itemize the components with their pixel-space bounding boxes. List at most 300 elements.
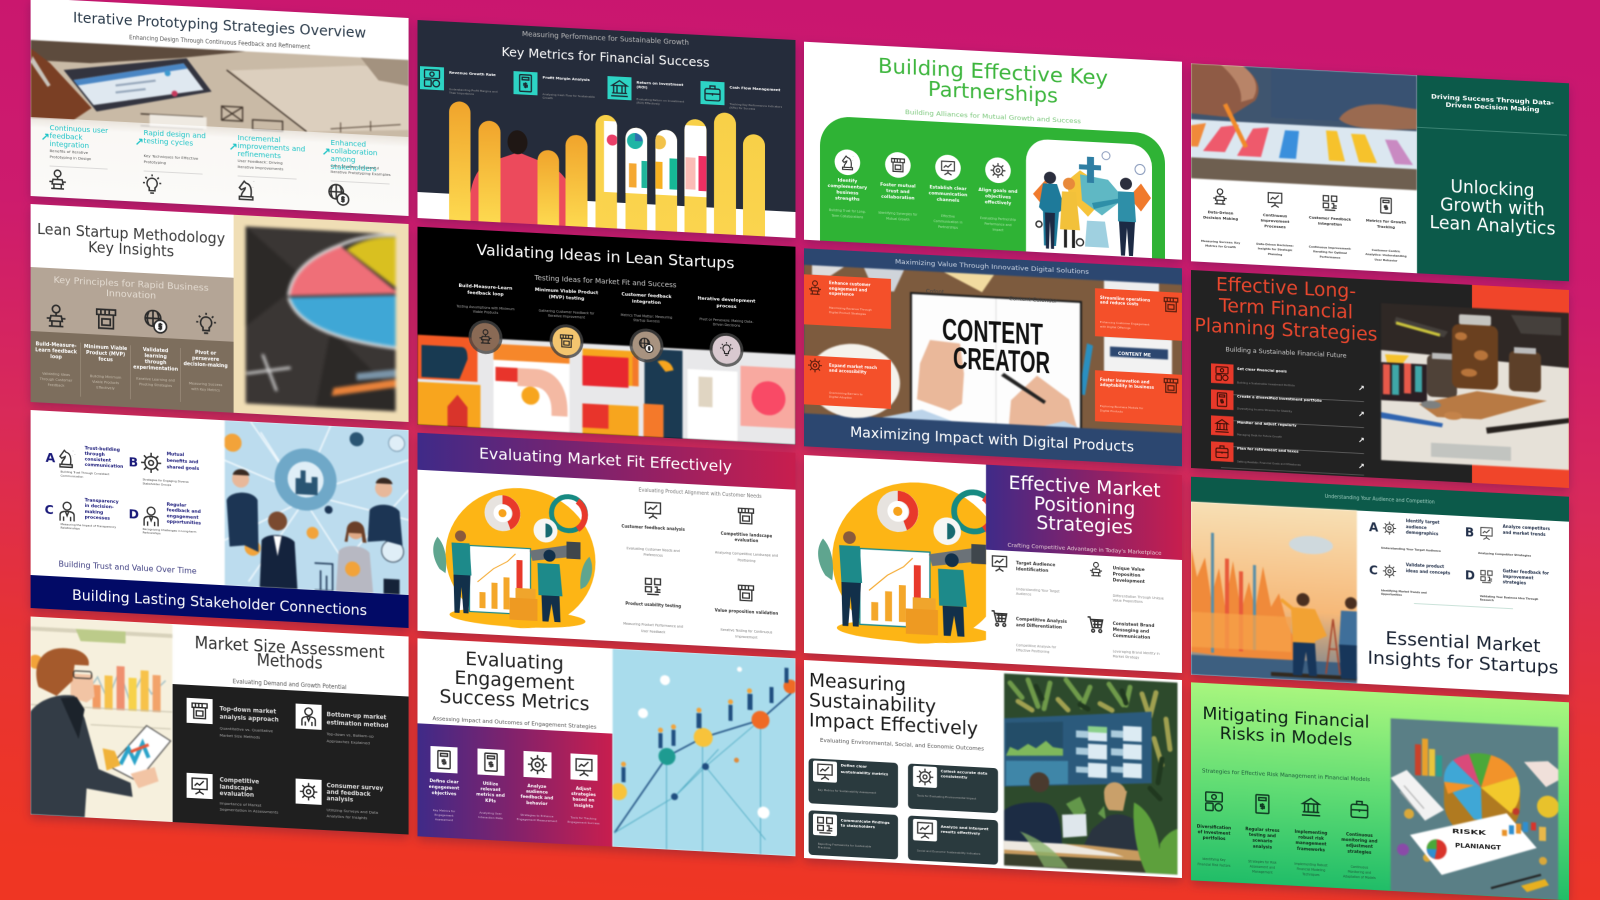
subtitle	[1431, 93, 1554, 115]
step: mutual trust: trust and	[886, 188, 910, 195]
title: Unlocking	[1450, 177, 1535, 201]
item descriptions: Iterative Learning and	[136, 377, 175, 383]
item: consumer survey: and feedback	[327, 790, 371, 798]
panel: Maximizing Impact with Digital Products	[804, 248, 1182, 466]
subtitle: Building Alliances for Mutual Growth and Success	[905, 109, 1081, 125]
step: align goals: Evaluating Partnership	[980, 216, 1016, 222]
photo: team viewing dashboard among plants	[1004, 673, 1178, 875]
step: communication: channels	[937, 197, 960, 204]
item: bottom-up: estimation method	[327, 720, 389, 729]
item: risk frameworks: Implementing	[1295, 829, 1327, 836]
item C: ideas and concepts	[1406, 568, 1451, 575]
item: Continuous user feedback integration	[41, 123, 108, 191]
card: collect data: Collect accurate data	[941, 768, 988, 776]
item: customer feedback	[1309, 195, 1352, 260]
row: set clear goals: Building a Sustainable Investment Portfolio	[1237, 380, 1295, 388]
callout: expand reach: Digital Adoption	[829, 394, 852, 400]
callout: streamline operations	[1095, 288, 1182, 341]
item D: D	[1465, 568, 1475, 583]
item A: consistent	[85, 456, 112, 464]
item: diversification: portfolios	[1203, 835, 1226, 841]
item: consistent brand: Communication	[1113, 633, 1150, 641]
step: define clear objectives: engagement	[429, 784, 459, 792]
step: analyze feedback: Analyze	[527, 783, 546, 790]
item: continuous improvement: Processes	[1264, 223, 1286, 229]
item: continuous monitoring: Continuous	[1351, 865, 1369, 870]
panel: Mitigating Financial Risks in Models	[1191, 682, 1569, 900]
title: Maximizing Impact with Digital Products	[850, 425, 1134, 456]
item: Incremental improvements and refinements: improvements and	[238, 141, 305, 154]
step: complementary strengths: Identify	[838, 177, 857, 185]
title: Measuring	[809, 670, 906, 696]
row: retirement and taxes: ↗	[1358, 462, 1365, 471]
illustration: people on a network graph	[610, 648, 798, 856]
metric: profit margin	[514, 71, 595, 102]
title: Sustainability	[809, 690, 936, 718]
photo: coin jars on financial papers	[1381, 303, 1569, 470]
item: Incremental improvements and refinements: User Feedback: Driving	[238, 158, 283, 165]
item C: Transparency	[85, 497, 119, 505]
step: customer feedback: Metrics That Matter: Measuring	[621, 313, 672, 320]
item descriptions: Through Customer	[39, 377, 73, 383]
item C	[1369, 560, 1451, 599]
step: MVP testing	[535, 287, 599, 360]
step: utilize metrics: Utilize	[483, 781, 498, 788]
metric: ROI: (ROI) Effectively	[636, 100, 660, 106]
item: customer feedback analysis: Evaluating Customer Needs and	[627, 546, 680, 553]
item B: B	[1465, 525, 1474, 540]
callout: foster innovation: Exploring Business Models for	[1100, 404, 1144, 410]
step: communication	[929, 154, 967, 230]
metric: revenue growth: Revenue Growth Rate	[449, 70, 496, 77]
step: mutual trust	[878, 151, 918, 222]
step: align goals	[978, 156, 1018, 233]
item A: A	[1369, 520, 1379, 535]
item C: Measuring the Impact of Transparency	[61, 522, 116, 529]
item: competitive analysis: Competitive Analysis	[1016, 616, 1067, 625]
item: continuous monitoring	[1341, 800, 1378, 880]
item: product usability: Measuring Product Performance and	[623, 622, 683, 629]
title: Insights for Startups	[1368, 649, 1558, 679]
item: unique value: Value Propositions	[1113, 598, 1143, 604]
poster lettering line two: PLANIANGT	[1455, 841, 1502, 852]
item descriptions: Effectively	[96, 385, 115, 390]
item D: opportunities	[167, 519, 201, 527]
step: customer feedback	[621, 291, 673, 364]
item labels: experimentation	[133, 364, 179, 373]
subtitle: Building a Sustainable Financial Future	[1225, 347, 1347, 360]
metric: cash flow: (KPIs) for Success	[730, 105, 756, 111]
step: MVP testing: Minimum Viable Product	[535, 287, 599, 296]
step: iterative development: Iterative development	[698, 296, 756, 305]
notebook lettering: CREATOR	[953, 340, 1050, 380]
card: communicate findings: Reporting Frameworks for Sustainable	[818, 842, 871, 849]
item D: Gather feedback for	[1503, 568, 1549, 576]
step: define clear objectives	[429, 746, 459, 823]
item: data-driven decision making	[1201, 188, 1240, 249]
item: diversification	[1197, 791, 1231, 868]
item: customer feedback analysis	[621, 501, 686, 559]
title	[38, 222, 225, 258]
item A	[1369, 516, 1441, 553]
item A: communication	[85, 462, 123, 470]
step: adjust strategies: Adjust	[576, 786, 591, 792]
item: customer feedback: Iterating for Optimal	[1313, 249, 1347, 255]
title: Effective Long-	[1216, 274, 1356, 303]
item: stress testing: analysis	[1253, 843, 1273, 849]
title: Essential Market	[1385, 629, 1541, 657]
item: consumer survey: Analytics for Insights	[327, 813, 367, 820]
step: complementary strengths: strengths	[835, 195, 860, 203]
title: Risks in Models	[1220, 724, 1352, 750]
callout: enhance engagement: Enhance customer	[829, 280, 871, 287]
row: retirement and taxes: Setting Realistic Financial Goals and Milestones	[1237, 459, 1301, 467]
step: MVP testing: (MVP) testing	[549, 294, 584, 302]
item: target audience: Understanding Your Target	[1016, 587, 1060, 594]
item D: Regular	[167, 502, 187, 509]
step: customer feedback: Startup Success	[633, 318, 660, 324]
item: competitive landscape: Analyzing Competitive Landscape and	[715, 550, 778, 558]
item: data-driven decision making: Metrics for Growth	[1205, 244, 1236, 249]
step: analyze feedback: audience	[526, 789, 548, 796]
item: Enhanced collaboration among stakeholders: collaboration	[331, 146, 377, 157]
item: continuous monitoring: adjustment	[1346, 843, 1373, 849]
callout: enhance engagement: Maximizing Revenue Through	[829, 306, 872, 312]
item C: processes	[85, 514, 110, 522]
item: competitive analysis: Competitive Analysis for	[1016, 643, 1057, 649]
item: competitive landscape: Segmentation in Assessments	[220, 807, 278, 815]
step: mutual trust: Identifying Synergies for	[878, 211, 918, 217]
title: Key Insights	[88, 238, 174, 261]
item: target audience: Identification	[1016, 566, 1048, 574]
panel: Building Lasting Stakeholder Connections	[31, 410, 409, 628]
step: build-measure-learn: Build-Measure-Learn	[459, 283, 512, 292]
item: risk frameworks: frameworks	[1297, 846, 1325, 852]
item: competitive landscape	[187, 773, 278, 815]
item: metrics for growth	[1365, 197, 1407, 263]
photo: content creator notebook on desk	[804, 265, 1182, 435]
item descriptions: Building Minimum	[90, 374, 122, 380]
item labels: loop	[50, 354, 62, 361]
item descriptions: Validating Ideas	[42, 372, 70, 377]
step: communication: Communication in	[933, 219, 963, 225]
step: utilize metrics	[476, 748, 505, 820]
panel: Unlocking Growth with Lean Analytics	[1191, 63, 1569, 281]
item descriptions: Measuring Success	[189, 381, 222, 387]
item: Continuous user feedback integration: Continuous user	[50, 123, 108, 135]
figure: person in red shirt	[470, 130, 566, 226]
illustration: team reading growth chart	[433, 484, 596, 632]
step: build-measure-learn: Viable Products	[473, 310, 498, 315]
item descriptions: Feedback	[48, 383, 65, 388]
title: Effective Market	[1009, 473, 1161, 502]
item labels: persevere	[192, 356, 220, 363]
step: define clear objectives: Define clear	[429, 778, 459, 786]
item labels: Learn feedback	[35, 347, 78, 355]
panel: Key Metrics for Financial Success	[418, 20, 796, 238]
item: bottom-up: Top-down vs. Bottom-up	[326, 731, 374, 739]
row: monitor and adjust: ↗	[1358, 436, 1365, 445]
item D: D	[129, 506, 139, 522]
bars: yellow capsule columns	[449, 98, 765, 236]
item: unique value: Unique Value	[1113, 565, 1145, 573]
title: Strategies	[1036, 513, 1133, 539]
title	[1194, 273, 1378, 346]
item: risk frameworks: Financial Modeling	[1297, 867, 1325, 872]
item: Continuous user feedback integration: feedback	[50, 131, 83, 142]
card: define metrics: Key Metrics for Sustainability Assessment	[818, 788, 877, 795]
item: metrics for growth: Metrics for Growth	[1366, 218, 1406, 225]
callout: streamline operations: with Digital Offerings	[1100, 325, 1131, 330]
subtitle: Maximizing Value Through Innovative Digital Solutions	[895, 259, 1089, 276]
item labels: Validated	[143, 347, 169, 354]
poster lettering: RISKK	[1452, 827, 1487, 837]
card: analyze results: Social and Economic Sustainability Indicators	[917, 848, 981, 856]
step: utilize metrics: Interaction Data	[478, 815, 503, 820]
step: align goals: Impact	[992, 228, 1004, 232]
item: customer feedback: Performance	[1320, 255, 1340, 260]
item D: engagement	[167, 513, 199, 521]
panel: Iterative Prototyping Strategies Overview	[31, 0, 409, 216]
step: MVP testing: Gathering Customer Feedback for	[539, 309, 595, 316]
item B	[1465, 522, 1551, 559]
metric: profit margin: Growth	[542, 95, 553, 100]
subtitle: Evaluating Environmental, Social, and Economic Outcomes	[820, 738, 984, 753]
item B: and market trends	[1503, 530, 1546, 537]
item: Enhanced collaboration among stakeholders: ↗	[322, 145, 331, 159]
card: analyze results	[908, 816, 998, 865]
title: Growth with	[1440, 195, 1545, 221]
item: Enhanced collaboration among stakeholders	[322, 137, 391, 208]
panel: Building Effective Key Partnerships	[804, 42, 1182, 260]
item: competitive landscape: Positioning	[738, 558, 755, 563]
item: stress testing	[1245, 794, 1280, 875]
item: stress testing: Assessment and	[1250, 864, 1275, 870]
item D: Partnerships	[143, 530, 161, 535]
title	[1368, 628, 1558, 679]
item: Enhanced collaboration among stakeholders: Enhanced	[331, 138, 366, 149]
row: set clear goals: ↗	[1358, 384, 1365, 393]
card: collect data: Tools for Evaluating Environmental Impact	[916, 793, 977, 801]
item A: through	[85, 451, 105, 458]
item: metrics for growth: User Behavior	[1375, 257, 1398, 263]
subtitle: Driving Success Through Data-	[1431, 93, 1554, 107]
item: customer feedback: Continuous Improvement:	[1309, 245, 1351, 251]
heading: key principles: Key Principles for Rapid Business	[54, 276, 209, 294]
item: continuous monitoring: Adaptation of Models	[1343, 874, 1376, 880]
callout: enhance engagement: engagement and	[829, 285, 867, 292]
item: customer feedback: Customer Feedback	[1309, 215, 1352, 222]
step: adjust strategies: Tools for Tracking	[570, 815, 597, 821]
item: metrics for growth: Analytics: Understanding	[1365, 252, 1407, 258]
item B: Strategies for Engaging Diverse	[143, 478, 189, 484]
item: competitive landscape: evaluation	[220, 791, 254, 799]
item: competitive analysis: Effective Positioning	[1016, 648, 1049, 654]
item: Incremental improvements and refinements: refinements	[238, 149, 281, 160]
item labels	[36, 341, 228, 371]
item: customer feedback analysis: Preferences	[644, 553, 663, 558]
step: define clear objectives: objectives	[432, 790, 457, 797]
item: stress testing: testing and	[1249, 832, 1276, 838]
title: Building Effective Key	[878, 54, 1108, 90]
item: continuous monitoring: monitoring and	[1341, 837, 1378, 844]
callout: foster innovation: Foster innovation and	[1100, 377, 1150, 385]
panel: Evaluating Market Fit Effectively	[418, 433, 796, 651]
item: competitive analysis: and Differentiation	[1016, 622, 1062, 631]
metric: ROI: Evaluating Return on Investment	[636, 97, 685, 103]
notebook lettering: Content Calendar	[1009, 296, 1058, 305]
item C: Identifying Market Trends and	[1381, 588, 1427, 595]
card: communicate findings	[809, 810, 898, 859]
item: consumer survey: Utilizing Surveys and Data	[327, 807, 379, 815]
photo: hand sketching wireframes beside tablet	[31, 40, 409, 146]
step: analyze feedback: feedback and	[521, 794, 553, 802]
subtitle: Testing Ideas for Market Fit and Success	[533, 274, 677, 289]
item B: Mutual	[167, 451, 185, 458]
item B: shared goals	[167, 464, 199, 472]
step: analyze feedback	[517, 751, 558, 823]
item C: C	[1369, 563, 1378, 578]
item: value proposition: Improvement	[735, 635, 758, 640]
step: communication: Partnerships	[938, 225, 958, 230]
item: metrics for growth: Tracking	[1377, 224, 1395, 230]
callout: expand reach	[804, 355, 891, 409]
item: risk frameworks: Techniques	[1301, 872, 1320, 877]
row: diversified portfolio: Diversifying Income Streams for Stability	[1237, 406, 1292, 413]
row: set clear goals: Set clear financial goals	[1237, 367, 1288, 374]
callout: streamline operations: and reduce costs	[1100, 300, 1139, 307]
item A: audience	[1406, 524, 1427, 530]
card: collect data	[908, 764, 998, 813]
item B: Analyze competitors	[1503, 524, 1551, 531]
metric: cash flow: Tracking Key Performance Indicators	[729, 102, 783, 109]
item: continuous monitoring: Continuous	[1346, 832, 1373, 838]
item: continuous improvement: Continuous	[1263, 212, 1288, 218]
row: set clear goals	[1211, 363, 1365, 402]
subtitle: Understanding Your Audience and Competition	[1325, 494, 1435, 506]
row: diversified portfolio: ↗	[1358, 410, 1365, 419]
title: Key Metrics for Financial Success	[501, 44, 710, 70]
step: adjust strategies: Engagement Success	[567, 820, 600, 825]
item labels: decision-making	[183, 361, 228, 369]
step: utilize metrics: KPIs	[485, 798, 496, 804]
item: target audience: Target Audience	[1016, 560, 1055, 568]
item: competitive landscape: Competitive landscape	[721, 531, 773, 538]
item: target audience: Audience	[1016, 592, 1031, 597]
panel: Lean Startup Methodology Key Insights	[31, 204, 409, 422]
notebook lettering: CONTENT ME	[1118, 351, 1151, 359]
step: communication: communication	[929, 190, 967, 198]
callout: expand reach: and accessibility	[829, 368, 867, 375]
subtitle: Evaluating Demand and Growth Potential	[233, 679, 347, 691]
item: unique value	[1090, 562, 1164, 605]
item A: Communication	[61, 474, 84, 479]
subtitle: Driven Decision Making	[1446, 101, 1540, 114]
item descriptions: Viable Products	[92, 380, 119, 385]
subtitle: Enhancing Design Through Continuous Feedback and Refinement	[129, 34, 311, 51]
item: Rapid design and testing cycles: Rapid design and	[144, 128, 206, 140]
item B: Stakeholder Groups	[143, 482, 172, 487]
item: data-driven decision making: Data-Driven	[1208, 209, 1234, 216]
step: MVP testing: Iterative Improvement	[548, 314, 586, 320]
step: adjust strategies: strategies	[571, 791, 596, 798]
step: complementary strengths: Term Collaborations	[831, 214, 864, 219]
item D	[130, 502, 201, 535]
metric: revenue growth: Understanding Profit Margins and	[449, 87, 498, 94]
item: value proposition: Value proposition validation	[715, 607, 778, 616]
title: Engagement	[454, 667, 574, 695]
step: align goals: objectives	[985, 193, 1011, 201]
item: Enhanced collaboration among stakeholders: Case Studies: Successful	[331, 163, 379, 170]
icons row	[47, 304, 216, 336]
step: complementary strengths: Building Trust for Long-	[829, 208, 866, 214]
item B: B	[129, 454, 138, 470]
lower fade panel	[30, 117, 408, 195]
item: data-driven decision making: Decision Making	[1203, 214, 1238, 221]
item A	[46, 446, 123, 478]
callout: enhance engagement: experience	[829, 291, 854, 297]
panel: Effective Long-Term Financial Planning Strategies	[1191, 270, 1569, 488]
metric: ROI	[608, 76, 685, 107]
item descriptions: with Key Metrics	[191, 387, 220, 393]
item: Incremental improvements and refinements	[229, 132, 305, 203]
item: data-driven decision making: Measuring Success: Key	[1201, 239, 1240, 245]
row: monitor and adjust: Monitor and adjust regularly	[1237, 420, 1297, 428]
item: stress testing: Management	[1252, 870, 1273, 875]
item: product usability: Product usability testing	[625, 601, 681, 609]
item: consistent brand: Consistent Brand	[1113, 621, 1154, 629]
row: retirement and taxes	[1211, 441, 1365, 475]
item: bottom-up: Bottom-up market	[327, 712, 387, 721]
title	[1202, 704, 1370, 751]
item: Rapid design and testing cycles: Key Techniques for Effective	[144, 153, 199, 161]
item C: making	[85, 509, 103, 516]
metric: revenue growth	[420, 66, 498, 97]
item: bottom-up: Approaches Explained	[327, 738, 370, 745]
step: analyze feedback: behavior	[526, 800, 548, 807]
callout: foster innovation	[1095, 370, 1182, 426]
photo: hand pointing at bar chart	[1191, 63, 1417, 190]
subtitle: Measuring Performance for Sustainable Growth	[522, 30, 689, 47]
item C: in decision-	[85, 503, 114, 511]
photo: business people in network	[224, 420, 409, 600]
step: customer feedback: Customer feedback	[621, 291, 673, 300]
metric: cash flow: Cash Flow Management	[730, 85, 781, 92]
photo: colourful poster wall	[418, 335, 796, 445]
item: continuous improvement: Improvement	[1261, 217, 1290, 224]
panel: Evaluating Engagement Success Metrics	[418, 638, 798, 856]
item: customer feedback: Integration	[1318, 221, 1342, 227]
item: continuous improvement: Planning	[1268, 252, 1282, 257]
item: value proposition	[715, 584, 778, 641]
card: communicate findings: to stakeholders	[841, 822, 876, 829]
item labels: learning	[144, 353, 167, 360]
title: Impact Effectively	[809, 710, 978, 740]
step: mutual trust: Mutual Growth	[886, 217, 910, 222]
panel: Market Size Assessment Methods	[29, 616, 409, 836]
step: utilize metrics: relevant	[480, 786, 501, 793]
metric: profit margin: Profit Margin Analysis	[542, 75, 590, 82]
card: define metrics: Define clear	[841, 762, 867, 769]
item C: Opportunities	[1381, 592, 1402, 597]
step: complementary strengths: business	[836, 189, 859, 197]
step: build-measure-learn: feedback loop	[467, 290, 504, 298]
step: mutual trust: collaboration	[881, 194, 915, 202]
step: complementary strengths	[828, 148, 867, 220]
item: continuous monitoring: strategies	[1347, 848, 1372, 855]
item: Continuous user feedback integration: integration	[50, 139, 89, 150]
item: competitive analysis	[992, 611, 1067, 655]
